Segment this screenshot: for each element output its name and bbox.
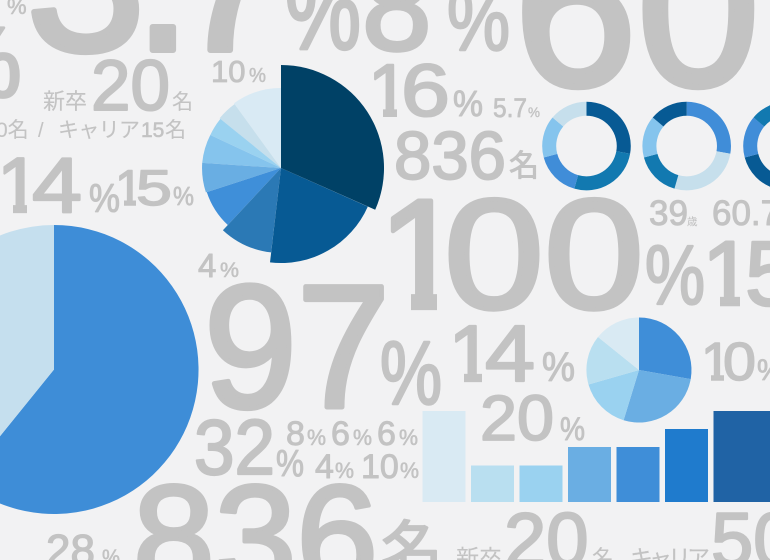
text: new grads 20: 新卒	[43, 89, 87, 114]
number: 39 years: 39	[649, 194, 688, 233]
number: 10% upper: %	[249, 65, 266, 87]
chart: donut 2	[649, 109, 724, 183]
number: 14% right	[455, 324, 574, 382]
number row: 8% 6% 6%: %	[353, 425, 372, 450]
number: 14% left: %	[89, 177, 120, 221]
number: 32%: 32	[194, 403, 275, 491]
number: 14% right: 1	[448, 309, 493, 398]
number: 10% right: 0	[723, 332, 756, 392]
number: 836 people small: 名	[509, 150, 539, 183]
number: 4%: %	[220, 259, 239, 282]
text: new grads 20	[43, 47, 193, 126]
number row: 8% 6% 6%: %	[307, 425, 326, 450]
number: 28%	[46, 526, 120, 560]
text: bottom career 50	[630, 498, 770, 560]
number: 32%: %	[276, 443, 304, 485]
number: 16%	[374, 63, 482, 118]
number: 5.7%: %	[528, 104, 540, 120]
number: 10% upper: 10	[211, 54, 245, 89]
number: 100%	[390, 196, 704, 312]
number: 97%: 97	[204, 250, 390, 445]
number: top giant 3.7%	[26, 0, 361, 96]
chart: large pie	[0, 225, 199, 514]
number: 15% left: 5	[136, 160, 172, 216]
number: 20% middle	[480, 382, 585, 454]
number row: 8% 6% 6%: %	[399, 425, 418, 450]
number: 15% left: %	[173, 181, 194, 211]
number: 15% left: 1	[115, 160, 143, 216]
text: bottom new grads 20	[456, 498, 614, 560]
number: 20% middle: %	[560, 411, 585, 447]
number: 16%: 6	[401, 49, 450, 132]
text: new grads 20: 名	[172, 91, 193, 114]
number: 4%	[198, 247, 239, 284]
number row: 4% 10%	[315, 448, 419, 486]
number: 4%: 4	[198, 247, 216, 284]
number row: 8% 6% 6%: 6	[331, 415, 350, 453]
number: 20% middle: 20	[480, 382, 554, 454]
number: 16%: 1	[368, 49, 409, 132]
number row: 8% 6% 6%: 6	[377, 415, 396, 453]
number row: 8% 6% 6%	[286, 415, 418, 453]
number: 14% right: 4	[485, 309, 535, 398]
number: 14% left: 4	[32, 141, 82, 229]
number: 16%: %	[453, 83, 483, 124]
number: 10% right	[706, 342, 770, 382]
number row: 4% 10%: 4	[315, 448, 334, 486]
number row: 8% 6% 6%: 8	[286, 415, 305, 453]
text: career 15: キャリア	[58, 119, 140, 142]
number: 836 people small: 836	[394, 118, 506, 194]
number: 97%: %	[380, 324, 442, 424]
text: career 15	[0, 119, 186, 142]
number row: 4% 10%: 10	[361, 448, 399, 486]
number: 100%: 1	[378, 168, 465, 342]
number: 10% right: 1	[701, 332, 731, 392]
chart: small pie	[586, 317, 691, 423]
number: 15% left	[119, 170, 194, 206]
number: 5.7%: 5.7	[493, 93, 527, 123]
chart: bar chart	[422, 411, 770, 502]
number: 10% upper	[211, 54, 266, 89]
number row: 4% 10%: %	[335, 458, 354, 483]
number: 15 right: 1	[702, 223, 753, 325]
number row: 4% 10%: %	[400, 458, 419, 483]
number: 39 years: 歳	[687, 216, 698, 228]
number: top 8%	[362, 0, 510, 77]
text: career 15: /	[38, 120, 44, 142]
number: 15 right	[710, 240, 770, 308]
text: career 15: 15	[141, 119, 164, 142]
chart: donut 1	[549, 109, 624, 183]
number: 14% right: %	[542, 344, 575, 390]
chart: exploded radius pie	[202, 65, 384, 263]
number: 100%: 00	[444, 168, 644, 342]
number: 100%: %	[645, 228, 705, 322]
chart: donut 3	[750, 109, 770, 182]
text: new grads 20: 20	[91, 47, 170, 126]
text: career 15: 名	[165, 119, 186, 142]
number: 14% left	[3, 157, 120, 214]
